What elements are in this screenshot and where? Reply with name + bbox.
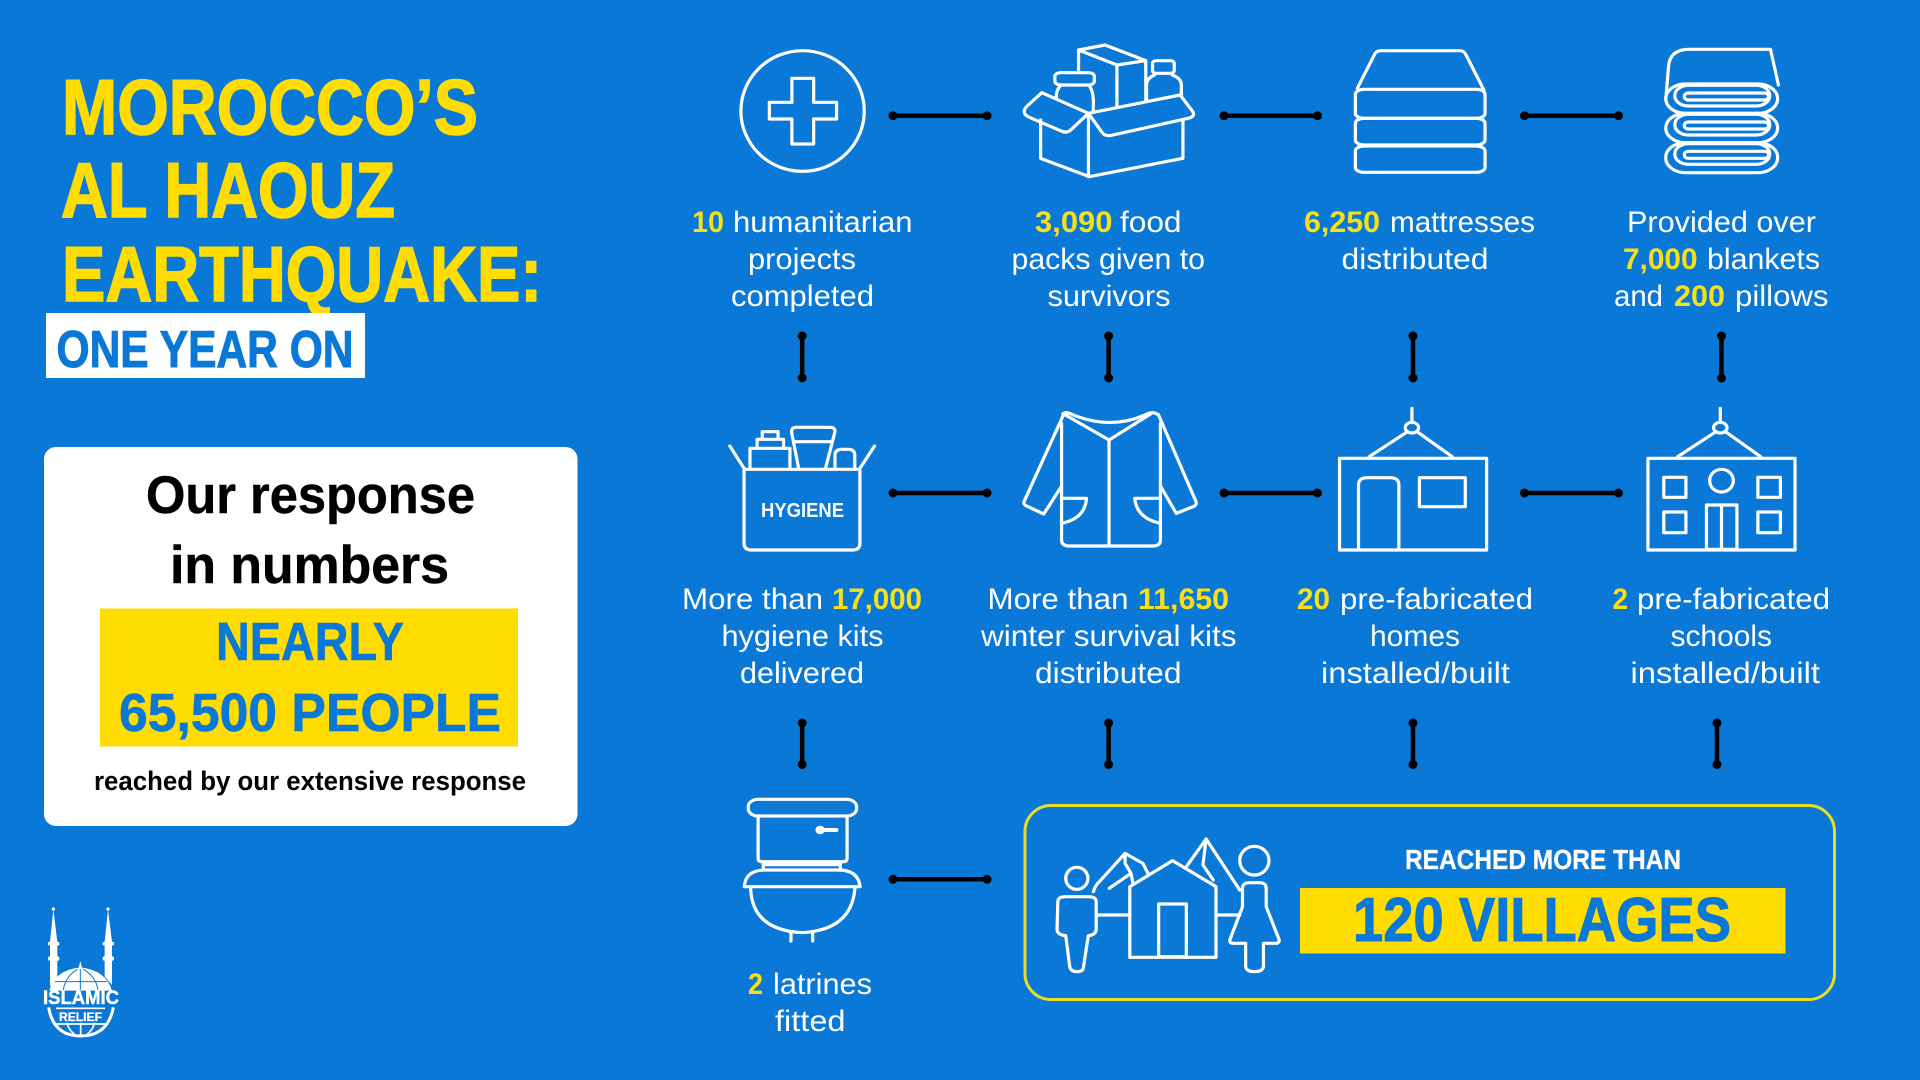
panel heading: Our response <box>146 466 475 525</box>
text: mattresses: mattresses <box>1390 206 1535 239</box>
title: EARTHQUAKE: <box>62 230 542 318</box>
icon: toilet <box>744 799 860 941</box>
highlight: nearly 65,500 people: 65,500 PEOPLE <box>119 683 501 743</box>
text: hygiene kits: delivered <box>740 657 864 690</box>
connector <box>888 488 992 498</box>
title <box>61 63 542 318</box>
text: blankets and pillows: and <box>1614 280 1663 313</box>
text: mattresses: distributed <box>1342 243 1488 276</box>
text: pre-fabricated schools <box>1612 583 1830 690</box>
text: latrines <box>748 968 872 1038</box>
icon: pre-fabricated home <box>1340 408 1487 550</box>
panel heading: in numbers <box>170 536 449 595</box>
text: latrines: latrines <box>773 968 872 1001</box>
text: hygiene kits: 17,000 <box>832 583 922 616</box>
text: blankets and pillows: Provided over <box>1627 206 1816 239</box>
connector <box>798 718 807 769</box>
text: latrines: fitted <box>775 1005 846 1038</box>
icon: food box <box>1024 45 1194 177</box>
text: blankets and pillows: pillows <box>1735 280 1828 313</box>
connector <box>1104 332 1113 382</box>
text: pre-fabricated homes <box>1297 583 1533 690</box>
text: winter survival kits: 11,650 <box>1138 583 1229 616</box>
text: pre-fabricated homes: homes <box>1370 620 1460 653</box>
text: blankets and pillows: 7,000 <box>1623 243 1698 276</box>
text: winter survival kits: winter survival kits <box>980 620 1236 653</box>
text: pre-fabricated schools: schools <box>1670 620 1772 653</box>
text: winter survival kits: distributed <box>1035 657 1182 690</box>
text: pre-fabricated homes: pre-fabricated <box>1340 583 1533 616</box>
title: MOROCCO’S <box>62 63 478 151</box>
connector <box>1220 488 1322 498</box>
callout highlight: 120 VILLAGES <box>1353 886 1731 955</box>
icon: medical cross <box>741 51 864 171</box>
text: latrines: 2 <box>748 968 763 1001</box>
text: humanitarian projects: 10 <box>692 206 724 239</box>
icon: hygiene kit: HYGIENE <box>761 499 844 522</box>
text: blankets and pillows: blankets <box>1707 243 1820 276</box>
text: pre-fabricated schools: installed/built <box>1630 657 1821 690</box>
text: pre-fabricated homes: installed/built <box>1321 657 1511 690</box>
text: blankets and pillows <box>1614 206 1828 313</box>
highlight: nearly 65,500 people <box>100 608 518 746</box>
text: food packs: food <box>1120 206 1182 239</box>
icon: pre-fabricated school <box>1648 408 1795 550</box>
connector <box>1408 718 1418 769</box>
text: humanitarian projects: completed <box>731 280 874 313</box>
callout label: REACHED MORE THAN <box>1405 844 1681 875</box>
subtitle: one year on: ONE YEAR ON <box>56 321 354 379</box>
icon: folded blankets <box>1666 49 1778 173</box>
logo: Islamic Relief: ISLAMIC <box>43 988 119 1009</box>
connector <box>1520 111 1623 120</box>
icon: mattresses <box>1355 51 1485 172</box>
icon: winter jacket <box>1024 413 1196 546</box>
text: hygiene kits <box>682 583 922 690</box>
callout: reached 120 villages <box>1025 806 1834 1000</box>
text: pre-fabricated homes: 20 <box>1297 583 1330 616</box>
connector <box>1104 718 1113 769</box>
connector <box>1717 332 1726 382</box>
logo: Islamic Relief: RELIEF <box>59 1010 102 1024</box>
text: mattresses: 6,250 <box>1304 206 1380 239</box>
text: food packs <box>1012 206 1205 313</box>
panel caption: reached by our extensive response <box>94 766 526 796</box>
connector <box>1408 332 1418 382</box>
text: humanitarian projects: projects <box>748 243 856 276</box>
connector <box>1220 111 1322 120</box>
text: pre-fabricated schools: pre-fabricated <box>1637 583 1830 616</box>
text: hygiene kits: More than <box>682 583 823 616</box>
connector <box>798 332 807 382</box>
text: blankets and pillows: 200 <box>1674 280 1725 313</box>
text: hygiene kits: hygiene kits <box>722 620 884 653</box>
text: mattresses <box>1304 206 1535 276</box>
text: food packs: survivors <box>1048 280 1170 313</box>
icon: hygiene kit <box>730 427 875 550</box>
logo: Islamic Relief <box>43 907 119 1036</box>
highlight: nearly 65,500 people: NEARLY <box>216 612 404 672</box>
text: food packs: 3,090 <box>1035 206 1112 239</box>
text: winter survival kits <box>980 583 1236 690</box>
text: humanitarian projects: humanitarian <box>733 206 912 239</box>
panel: response in numbers <box>44 447 578 826</box>
connector <box>888 875 992 884</box>
title: AL HAOUZ <box>61 146 395 234</box>
text: pre-fabricated schools: 2 <box>1612 583 1628 616</box>
connector <box>1520 488 1623 498</box>
text: humanitarian projects <box>692 206 912 313</box>
icon: village with people <box>1057 839 1279 972</box>
text: food packs: packs given to <box>1012 243 1205 276</box>
text: winter survival kits: More than <box>988 583 1128 616</box>
panel heading <box>146 466 475 595</box>
connector <box>888 111 992 120</box>
connector <box>1712 718 1722 769</box>
